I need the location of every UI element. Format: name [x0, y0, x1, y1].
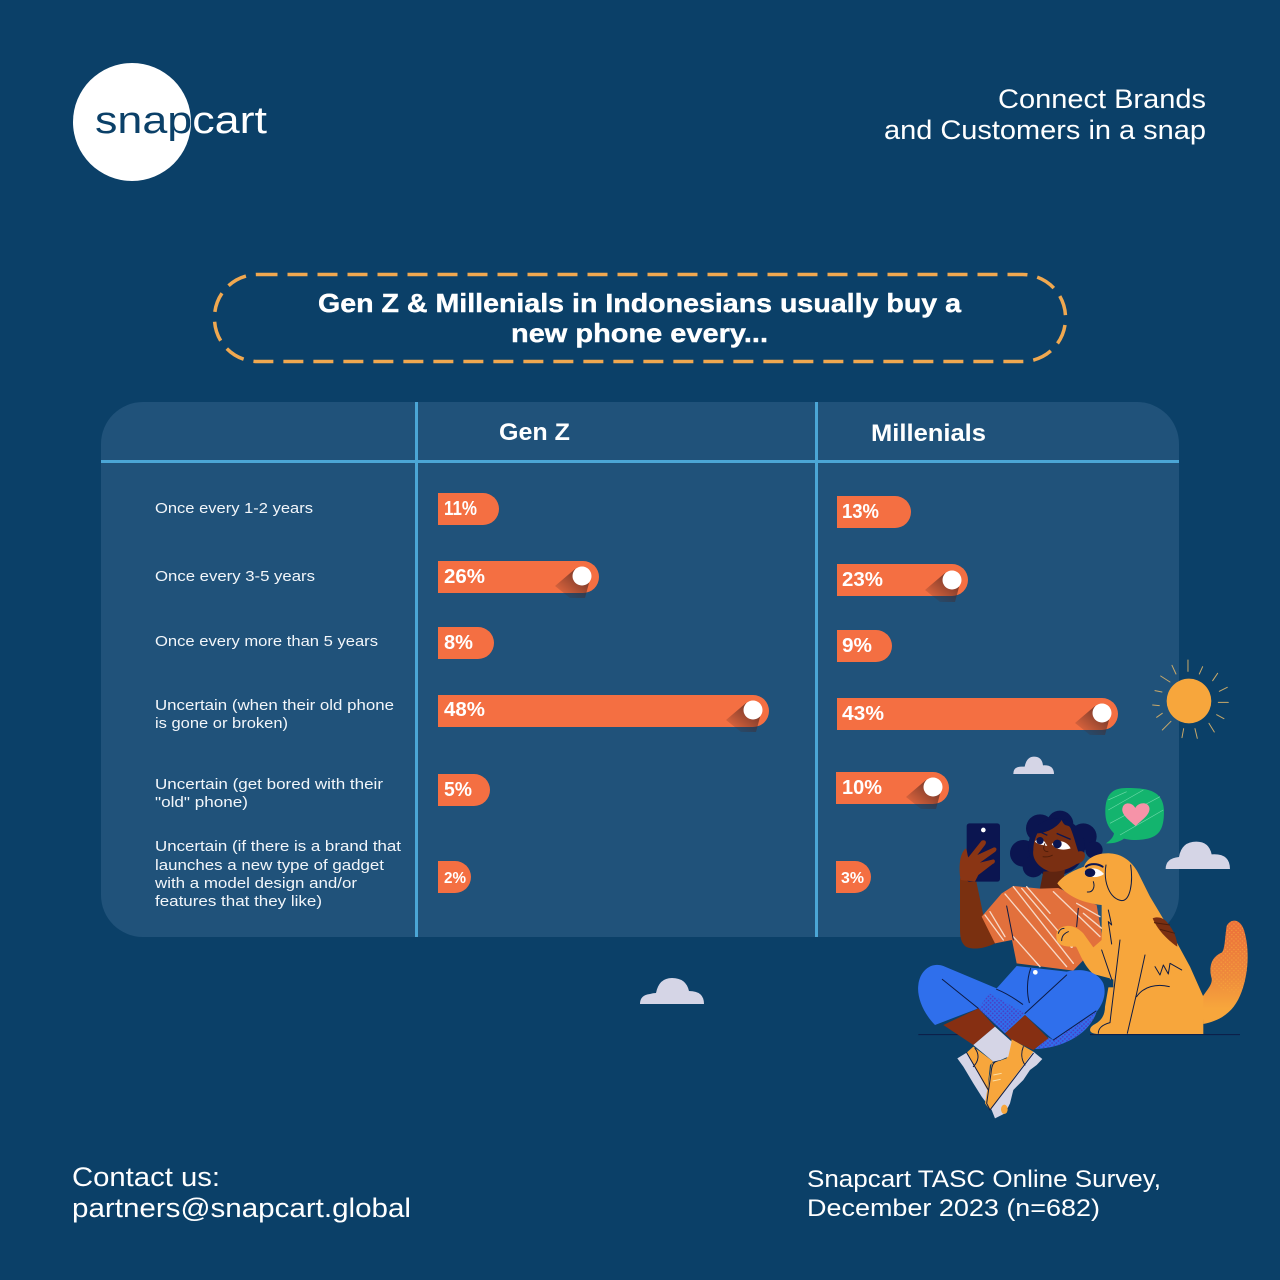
- body: [1056, 853, 1203, 1034]
- source note: [807, 1166, 1161, 1222]
- character: dog: [1056, 853, 1248, 1034]
- arm: [960, 878, 995, 949]
- row labels: is gone or broken): [155, 715, 288, 732]
- bar chart: Gen Z: 2%: [444, 870, 466, 887]
- hair: [1010, 811, 1103, 878]
- woman hand on dog: [1153, 917, 1177, 947]
- icon: sun: [1153, 660, 1228, 738]
- gap between leg and body: [1104, 979, 1113, 987]
- logo: snapcart: snapcart: [95, 100, 268, 142]
- bar chart: Gen Z: 26%: [444, 566, 485, 588]
- title in dashed pill: Gen Z & Millenials in Indonesians usually buy a: [318, 288, 962, 318]
- bar chart: Millenials: 13%: [842, 501, 879, 523]
- row labels: Once every 1-2 years: [155, 500, 313, 517]
- bar chart: Millenials: 43%: [842, 703, 884, 725]
- row labels: Uncertain (if there is a brand that: [155, 838, 402, 855]
- scenery: sun, clouds and speech bubble: [1013, 660, 1230, 869]
- row labels: Uncertain (when their old phone: [155, 697, 394, 714]
- tagline: and Customers in a snap: [884, 115, 1206, 145]
- bar chart: Millenials: [836, 496, 1118, 893]
- logo: snapcart: [73, 63, 268, 181]
- icon: smartphone: [967, 823, 1000, 882]
- contact: [72, 1162, 411, 1223]
- bar chart: Millenials: 23%: [842, 569, 883, 591]
- bar chart: Gen Z: 11%: [444, 498, 477, 520]
- character: woman upper body: [960, 811, 1103, 971]
- finger lines: [1154, 923, 1175, 933]
- face: [1033, 820, 1085, 872]
- bar chart: Gen Z: 5%: [444, 779, 472, 801]
- ground line: [918, 1033, 1240, 1036]
- bar chart: Millenials: 9%: [842, 635, 872, 657]
- logo: snapcart: snapcart: [95, 100, 268, 142]
- tagline: Connect Brands: [998, 84, 1206, 114]
- panel: survey table: [101, 402, 1179, 937]
- row labels: Uncertain (get bored with their: [155, 776, 383, 793]
- title in dashed pill: new phone every...: [511, 318, 768, 348]
- source note: Snapcart TASC Online Survey,: [807, 1166, 1161, 1193]
- column heading: Millenials: Millenials: [871, 420, 986, 447]
- title in dashed pill: [214, 274, 1066, 362]
- column heading: Gen Z: Gen Z: [499, 419, 570, 446]
- source note: December 2023 (n=682): [807, 1195, 1100, 1222]
- legs: [943, 1008, 1048, 1050]
- bar chart: Millenials: 10%: [842, 777, 882, 799]
- icon: cloud bottom centre: [640, 978, 704, 1004]
- bar chart: Gen Z: 48%: [444, 699, 485, 721]
- contact: Contact us:: [72, 1162, 220, 1192]
- character: woman lower body: [918, 965, 1240, 1118]
- sock: [973, 1027, 1012, 1062]
- icon: small cloud: [1013, 757, 1054, 774]
- row labels: [154, 500, 402, 910]
- icon: green speech bubble with heart: [1105, 788, 1164, 843]
- illustration: woman and dog selfie with sun and clouds: [918, 660, 1248, 1118]
- row labels: features that they like): [155, 893, 322, 910]
- shirt: [982, 886, 1103, 971]
- jeans: [918, 965, 1105, 1049]
- tail: [1202, 921, 1248, 1024]
- row labels: "old" phone): [155, 794, 248, 811]
- row labels: Once every more than 5 years: [155, 633, 378, 650]
- bar chart: Millenials: 3%: [841, 870, 864, 887]
- row labels: Once every 3-5 years: [155, 568, 315, 585]
- row labels: with a model design and/or: [154, 875, 357, 892]
- bar chart: Gen Z: 8%: [444, 632, 473, 654]
- icon: right cloud: [1166, 842, 1230, 869]
- contact: partners@snapcart.global: [72, 1193, 411, 1223]
- hand: [960, 840, 996, 882]
- row labels: launches a new type of gadget: [155, 857, 385, 874]
- eye: [1084, 864, 1104, 877]
- fur and ear lines: [1058, 865, 1182, 1033]
- shoe sole: [957, 1052, 1042, 1118]
- tagline: [884, 84, 1206, 145]
- shoes: [967, 1039, 1033, 1114]
- bar chart: Gen Z: [438, 493, 769, 893]
- neck: [1040, 870, 1065, 892]
